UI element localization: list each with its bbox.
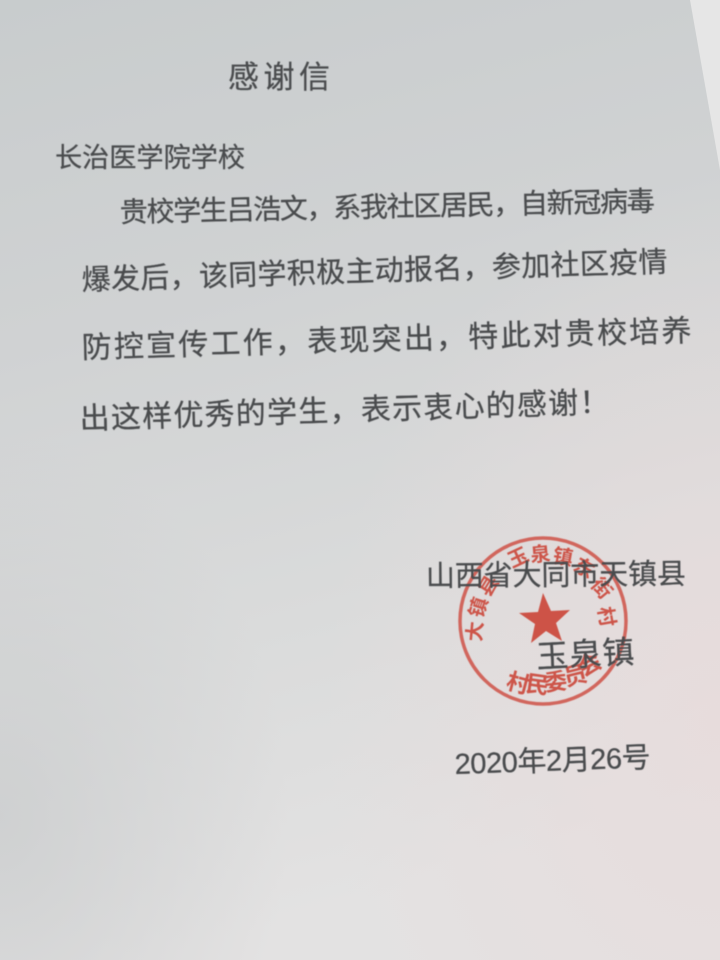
signature place: 山西省大同市天镇县 [426,558,686,593]
stamp ring [460,538,626,704]
stamp lower text: 民 [524,670,551,699]
stamp upper text: 村 [593,605,619,629]
red village committee stamp [460,538,626,704]
date: 2020年2月26号 [454,741,651,781]
paragraph line 2: 爆发后，该同学积极主动报名，参加社区疫情 [81,246,668,297]
title: 感谢信 [228,60,330,95]
stamp upper text: 玉 [505,544,532,573]
stamp lower text: 员 [561,660,590,691]
stamp upper text: 泉 [529,542,551,567]
stamp upper text: 镇 [551,544,575,570]
signature and date handwriting [426,558,686,781]
paragraph line 3: 防控宣传工作，表现突出，特此对贵校培养 [81,315,692,365]
stamp upper text: 镇 [465,594,493,621]
paragraph line 4: 出这样优秀的学生，表示衷心的感谢！ [79,386,610,436]
letter body handwriting [55,60,692,436]
stamp star [519,593,570,643]
signature town: 玉泉镇 [535,634,635,675]
salutation: 长治医学院学校 [55,143,245,173]
stamp lower text: 委 [543,668,568,696]
stamp lower text: 村 [504,668,533,699]
stamp upper text: 东 [570,553,599,583]
stamp upper text: 街 [586,573,617,604]
stamp upper text [463,542,619,642]
paragraph line 1: 贵校学生吕浩文，系我社区居民，自新冠病毒 [119,186,655,228]
stamp upper text: 大 [463,621,488,642]
stamp lower text [504,648,606,699]
stamp upper text: 县 [475,572,504,601]
stamp lower text: 会 [573,648,606,681]
